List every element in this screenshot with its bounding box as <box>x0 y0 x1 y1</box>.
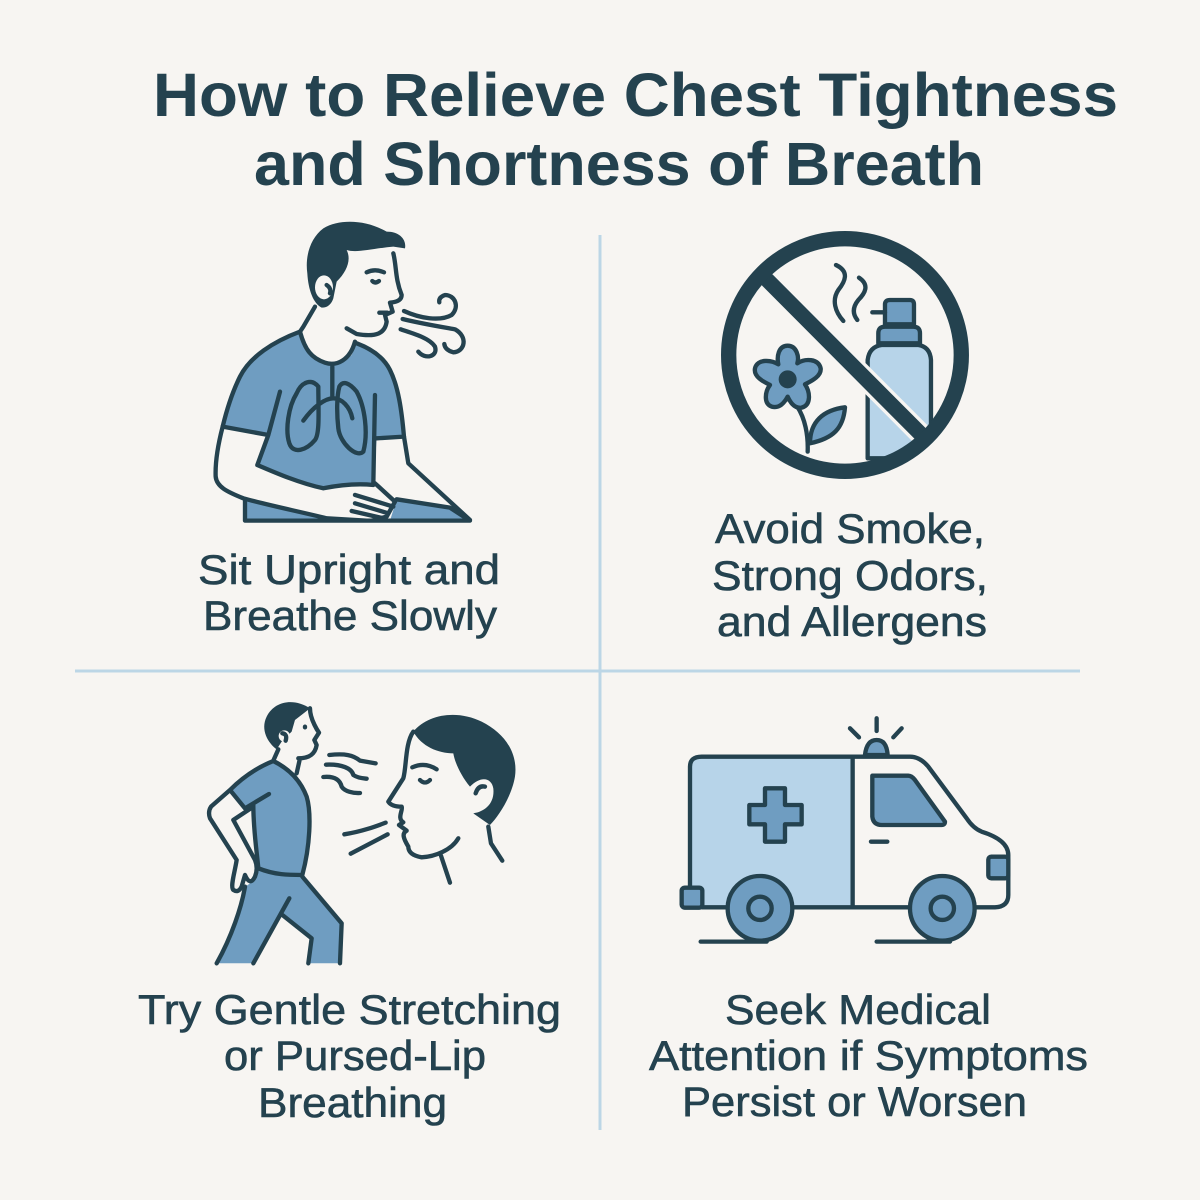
label: avoid smoke: and Allergens <box>717 598 987 645</box>
label: sit upright <box>198 546 500 639</box>
label: sit upright: Breathe Slowly <box>203 592 497 639</box>
title: and Shortness of Breath <box>254 130 984 198</box>
label: seek medical attention: Attention if Symptoms <box>649 1032 1088 1079</box>
label: gentle stretching: Breathing <box>258 1079 447 1126</box>
label: avoid smoke: Avoid Smoke, <box>715 505 985 552</box>
label: gentle stretching: or Pursed-Lip <box>224 1032 486 1079</box>
label: seek medical attention <box>649 986 1088 1125</box>
label: sit upright: Sit Upright and <box>198 546 500 593</box>
label: seek medical attention: Seek Medical <box>725 986 991 1033</box>
label: avoid smoke: Strong Odors, <box>712 552 988 599</box>
title: How to Relieve Chest Tightness <box>153 61 1118 129</box>
label: avoid smoke <box>712 505 988 645</box>
icon: ambulance <box>682 718 1008 942</box>
label: gentle stretching <box>138 986 561 1126</box>
icon: man sitting upright and breathing slowly <box>216 222 470 521</box>
label: seek medical attention: Persist or Worsen <box>682 1078 1027 1125</box>
icon: person stretching and pursed-lip breathing <box>209 702 515 963</box>
label: gentle stretching: Try Gentle Stretching <box>138 986 561 1033</box>
icon: no smoke, odors and allergens <box>729 239 961 471</box>
title <box>153 61 1118 198</box>
